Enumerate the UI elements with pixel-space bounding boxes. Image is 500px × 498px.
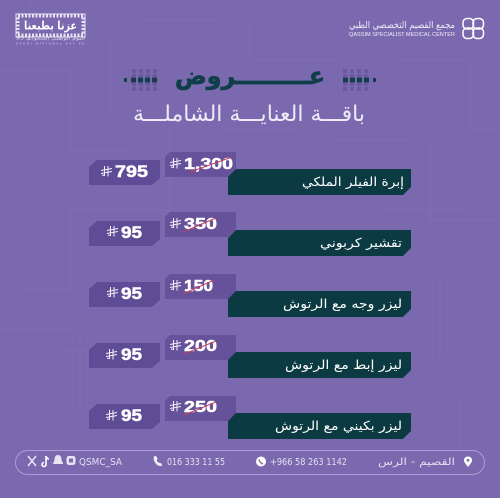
social handle: QSMC_SA <box>79 457 122 468</box>
old price 200 <box>165 335 236 360</box>
service bar: carbon peel: تقشير كربوني <box>320 235 403 251</box>
new price 95 <box>89 343 160 368</box>
old price 1,300: 1,300 <box>184 156 233 173</box>
new price 95 <box>89 404 160 429</box>
organisation name: مجمع القصيم التخصصي الطبي <box>349 20 455 31</box>
new price 795 <box>89 160 160 185</box>
service bar: filler: إبرة الفيلر الملكي <box>302 174 404 190</box>
logo: national day: اليوم الوطني السعودي 95 <box>16 36 85 40</box>
logo: national day <box>16 14 85 46</box>
title: عـــــــــروض <box>175 62 325 90</box>
service bar: bikini laser <box>228 413 411 439</box>
new price 795: 795 <box>115 162 148 181</box>
new price 95: 95 <box>121 406 142 425</box>
icon: whatsapp <box>256 456 266 466</box>
offer 4: underarm laser <box>89 335 411 378</box>
old price 150 <box>165 274 236 299</box>
new price 95 <box>89 282 160 307</box>
service bar: underarm laser <box>228 352 411 378</box>
subtitle: باقـــة العنايـــة الشاملـــة <box>133 102 365 127</box>
service bar: face laser: ليزر وجه مع الرتوش <box>283 296 402 312</box>
logo: national day: عزنا بطبعنا <box>24 18 77 32</box>
service bar: bikini laser: ليزر بكيني مع الرتوش <box>275 418 402 434</box>
service bar: carbon peel <box>228 230 411 256</box>
new price 95 <box>89 221 160 246</box>
icon: location pin <box>464 456 472 467</box>
offer 2: carbon peel <box>89 212 411 256</box>
old price 150: 150 <box>184 278 213 295</box>
old price 350: 350 <box>184 216 217 233</box>
icons: social media <box>28 455 76 466</box>
offer 1: filler <box>89 152 411 195</box>
old price 250: 250 <box>184 399 217 416</box>
location text: القصيم - الرس <box>378 457 455 468</box>
service bar: underarm laser: ليزر إبط مع الرتوش <box>285 357 402 373</box>
service bar: filler <box>228 169 411 195</box>
decoration: left pixel pattern <box>124 69 157 91</box>
logo: Qassim Specialist Medical Center <box>349 18 484 38</box>
offer 5: bikini laser <box>89 396 411 439</box>
old price 250 <box>165 396 236 421</box>
whatsapp number: +966 58 263 1142 <box>270 457 347 468</box>
footer contact bar <box>16 450 484 474</box>
new price 95: 95 <box>121 345 142 364</box>
new price 95: 95 <box>121 223 142 242</box>
icon: phone <box>154 456 162 466</box>
service bar: face laser <box>228 291 411 317</box>
logo: national day: SAUDI NATIONAL DAY 95 <box>16 42 84 46</box>
new price 95: 95 <box>121 284 142 303</box>
old price 350 <box>165 212 236 237</box>
old price 200: 200 <box>184 338 217 355</box>
decoration: right pixel pattern <box>343 69 376 91</box>
phone number: 016 333 11 55 <box>167 457 225 468</box>
old price 1,300 <box>165 152 236 177</box>
logo: Qassim Specialist Medical Center: QASSIM SPECIALIST MEDICAL CENTER <box>349 32 455 38</box>
offer 3: face laser <box>89 274 411 317</box>
icon: flower emblem <box>463 18 484 38</box>
